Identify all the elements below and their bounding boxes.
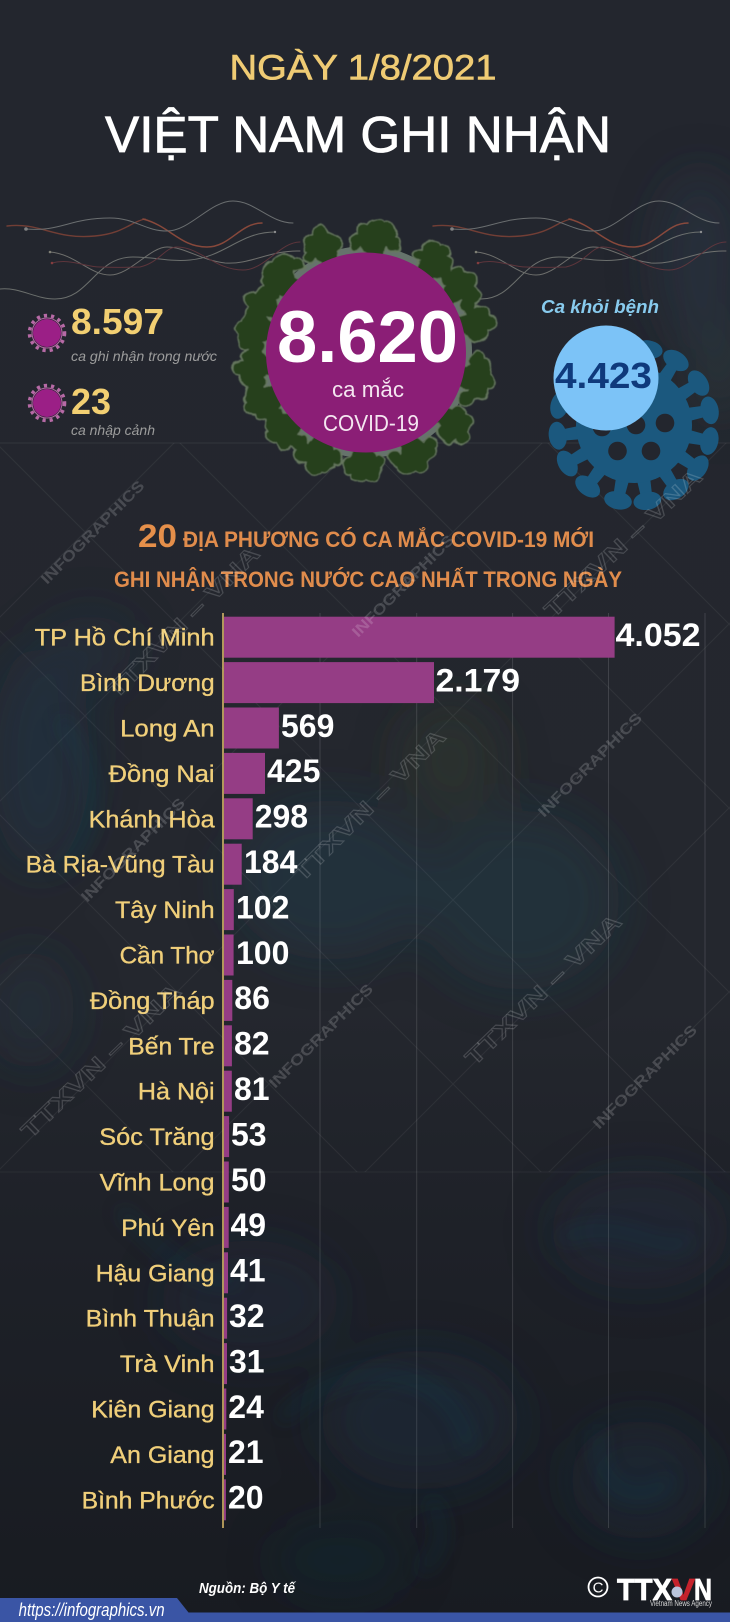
domestic cases number: 8.597 (71, 301, 164, 342)
province labels: Trà Vinh (120, 1351, 215, 1378)
total caption line 2: COVID-19 (323, 410, 419, 436)
watermarks: INFOGRAPHICS (78, 795, 189, 906)
watermarks: INFOGRAPHICS (38, 478, 148, 588)
province labels: Đồng Tháp (90, 988, 215, 1015)
bar chart (26, 613, 705, 1528)
province labels: Đồng Nai (109, 761, 215, 788)
logo: copyright and TTXVN: TTX (617, 1572, 672, 1607)
chart heading line 1 (138, 518, 594, 554)
logo: copyright and TTXVN: C (593, 1580, 604, 1596)
value labels: 82 (234, 1026, 270, 1062)
value labels: 49 (230, 1207, 266, 1243)
value labels: 86 (234, 980, 270, 1016)
logo: copyright and TTXVN: V (672, 1572, 695, 1607)
chart heading line 1: ĐỊA PHƯƠNG CÓ CA MẮC COVID-19 MỚI (183, 527, 594, 552)
province labels: TP Hồ Chí Minh (35, 625, 215, 652)
watermarks: INFOGRAPHICS (535, 710, 646, 821)
icon: blue virus (547, 338, 721, 512)
logo: copyright and TTXVN: N (694, 1572, 712, 1607)
province labels: Bình Phước (82, 1487, 215, 1514)
watermarks: TTXVN – VNA (288, 724, 451, 887)
value labels (228, 617, 700, 1516)
province labels: An Giang (110, 1442, 215, 1469)
province labels: Vĩnh Long (100, 1170, 215, 1196)
logo: copyright and TTXVN: Vietnam News Agency (650, 1599, 712, 1608)
icon: green virus behind total (231, 218, 501, 485)
recovered number: 4.423 (555, 355, 652, 396)
background lattice (0, 443, 730, 1172)
province labels: Khánh Hòa (89, 806, 215, 833)
watermarks (16, 464, 707, 1144)
province labels: Long An (120, 716, 215, 742)
icon: small virus domestic (30, 316, 64, 350)
value labels: 298 (255, 799, 308, 835)
province labels: Hậu Giang (96, 1260, 215, 1287)
value labels: 50 (231, 1162, 267, 1198)
value labels: 32 (229, 1298, 265, 1334)
province labels: Bình Thuận (86, 1306, 215, 1333)
watermarks: TTXVN – VNA (102, 541, 265, 704)
province labels (26, 625, 215, 1514)
footer banner (0, 1598, 730, 1622)
recovered label: Ca khỏi bệnh (541, 297, 659, 317)
logo: copyright and TTXVN (588, 1572, 712, 1608)
watermarks: TTXVN – VNA (16, 978, 186, 1144)
title: headline: VIỆT NAM GHI NHẬN (105, 106, 611, 163)
decorative wave lines right (426, 201, 726, 299)
recovered circle (554, 326, 658, 430)
value labels: 102 (236, 889, 289, 925)
value labels: 21 (228, 1434, 264, 1470)
total cases circle (266, 252, 466, 452)
value labels: 100 (236, 935, 289, 971)
value labels: 53 (231, 1116, 267, 1152)
province labels: Sóc Trăng (99, 1124, 215, 1151)
watermarks: INFOGRAPHICS (266, 981, 377, 1092)
watermarks: TTXVN – VNA (460, 909, 626, 1071)
chart heading line 1: 20 (138, 518, 177, 554)
watermarks: INFOGRAPHICS (590, 1022, 701, 1133)
value labels: 4.052 (616, 617, 700, 653)
icon: small virus imported (30, 386, 64, 420)
value labels: 81 (234, 1071, 270, 1107)
province labels: Bình Dương (80, 670, 215, 697)
watermarks: INFOGRAPHICS (349, 532, 458, 641)
province labels: Phú Yên (121, 1215, 215, 1242)
domestic cases caption: ca ghi nhận trong nước (71, 348, 217, 364)
province labels: Kiên Giang (91, 1396, 215, 1424)
total caption line 1: ca mắc (332, 377, 404, 402)
footer url: https://infographics.vn (19, 1600, 165, 1620)
decorative wave lines left (0, 201, 300, 299)
province labels: Hà Nội (138, 1079, 215, 1106)
province labels: Bà Rịa-Vũng Tàu (26, 852, 215, 879)
value labels: 31 (229, 1343, 265, 1379)
value labels: 569 (281, 708, 334, 744)
watermarks: TTXVN – VNA (539, 464, 707, 623)
province labels: Tây Ninh (115, 897, 215, 924)
value labels: 41 (230, 1253, 266, 1289)
chart heading line 2: GHI NHẬN TRONG NƯỚC CAO NHẤT TRONG NGÀY (114, 567, 622, 592)
value labels: 24 (228, 1389, 264, 1425)
province labels: Bến Tre (128, 1033, 215, 1060)
total number: 8.620 (277, 297, 458, 378)
imported cases number: 23 (71, 381, 111, 422)
value labels: 2.179 (436, 662, 520, 698)
title: date: NGÀY 1/8/2021 (230, 48, 496, 88)
source: Nguồn: Bộ Y tế (199, 1580, 296, 1597)
province labels: Cần Thơ (120, 942, 215, 970)
value labels: 425 (267, 753, 320, 789)
value labels: 184 (244, 844, 298, 880)
value labels: 20 (228, 1480, 264, 1516)
imported cases caption: ca nhập cảnh (71, 422, 155, 438)
